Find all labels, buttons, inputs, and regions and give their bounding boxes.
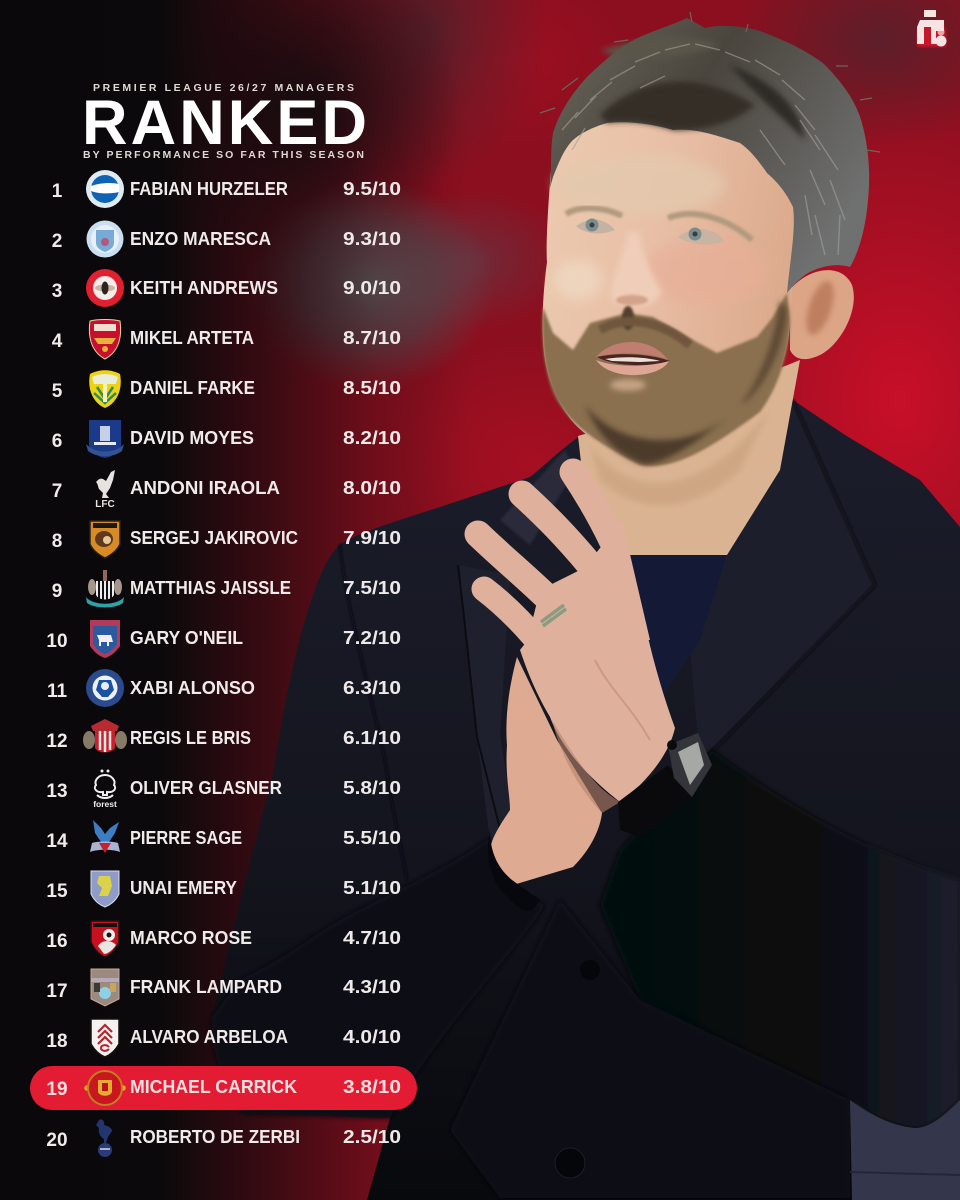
row 17: FRANK LAMPARD xyxy=(130,976,282,997)
row 10: 7.2/10 xyxy=(343,627,401,648)
row 16: 16 xyxy=(46,931,68,952)
hair xyxy=(540,12,880,293)
row 11: 11 xyxy=(47,681,67,702)
row 15: 15 xyxy=(46,881,68,902)
row 4: MIKEL ARTETA xyxy=(130,327,254,348)
crest: Aston Villa xyxy=(91,871,119,907)
crest: Nottingham Forest xyxy=(93,770,117,809)
lining xyxy=(850,1100,960,1200)
row 20: 20 xyxy=(46,1130,68,1151)
row 12: 12 xyxy=(46,731,68,752)
row 9: MATTHIAS JAISSLE xyxy=(130,577,291,598)
row 10: GARY O'NEIL xyxy=(130,627,243,648)
row 7: 8.0/10 xyxy=(343,477,401,498)
row 2: ENZO MARESCA xyxy=(130,228,271,249)
row 16: 4.7/10 xyxy=(343,927,401,948)
row 4: 8.7/10 xyxy=(343,327,401,348)
row 11: XABI ALONSO xyxy=(130,677,255,698)
crest: Brighton xyxy=(86,170,124,208)
watch xyxy=(618,733,712,837)
row 3 xyxy=(52,269,401,307)
row 1 xyxy=(52,170,401,208)
crest: Fulham xyxy=(91,1019,119,1057)
row 17 xyxy=(46,969,401,1006)
face xyxy=(543,100,800,464)
row 13: 5.8/10 xyxy=(343,777,401,798)
row 15: 5.1/10 xyxy=(343,877,401,898)
row 5 xyxy=(52,370,401,408)
row 19 highlighted: MICHAEL CARRICK xyxy=(130,1076,298,1097)
crest: Bournemouth xyxy=(91,921,119,957)
row 14: PIERRE SAGE xyxy=(130,827,242,848)
ear xyxy=(790,270,854,359)
row 3: KEITH ANDREWS xyxy=(130,277,278,298)
row 9: 7.5/10 xyxy=(343,577,401,598)
ring xyxy=(541,605,566,626)
row 7: 7 xyxy=(52,481,62,502)
row 3: 3 xyxy=(52,281,62,302)
row 1: 9.5/10 xyxy=(343,178,401,199)
row 12: 6.1/10 xyxy=(343,727,401,748)
row 9 xyxy=(52,570,401,608)
kicker: PREMIER LEAGUE 26/27 MANAGERS xyxy=(93,82,354,94)
shirt xyxy=(625,553,727,700)
row 18 xyxy=(46,1019,401,1057)
row 1: 1 xyxy=(52,181,63,202)
coat folds xyxy=(212,400,960,1200)
row 6: 8.2/10 xyxy=(343,427,401,448)
row 7: ANDONI IRAOLA xyxy=(130,477,280,498)
row 6: DAVID MOYES xyxy=(130,427,254,448)
row 13: 13 xyxy=(46,781,68,802)
crest: Nottingham Forest: forest xyxy=(93,799,117,809)
crest: Manchester City xyxy=(86,220,124,258)
sleeve: right forearm xyxy=(600,750,960,1128)
row 18: ALVARO ARBELOA xyxy=(130,1026,288,1047)
row 11: 6.3/10 xyxy=(343,677,401,698)
row 19 highlighted xyxy=(30,1066,417,1110)
row 15: UNAI EMERY xyxy=(130,877,238,898)
row 8: 8 xyxy=(52,531,62,552)
row 11 xyxy=(47,669,401,707)
crest: Crystal Palace xyxy=(90,820,120,853)
crest: Ipswich xyxy=(90,620,120,658)
row 12: REGIS LE BRIS xyxy=(130,727,251,748)
row 6 xyxy=(52,420,401,458)
row 2: 9.3/10 xyxy=(343,228,401,249)
row 20 xyxy=(46,1119,401,1157)
row 16: MARCO ROSE xyxy=(130,927,252,948)
row 8: SERGEJ JAKIROVIC xyxy=(130,527,298,548)
eyes and brows xyxy=(566,208,752,244)
row 14: 14 xyxy=(46,831,68,852)
row 20: 2.5/10 xyxy=(343,1126,401,1147)
row 19 highlighted: 19 xyxy=(46,1079,68,1100)
row 7 xyxy=(52,470,401,510)
highlight pill xyxy=(30,1066,417,1110)
crest: Newcastle xyxy=(86,570,124,608)
row 17: 17 xyxy=(46,981,68,1002)
crest: Liverpool xyxy=(95,470,115,510)
row 15 xyxy=(46,871,401,907)
row 9: 9 xyxy=(52,581,62,602)
crest: Sunderland xyxy=(83,719,127,752)
crest: Liverpool: LFC xyxy=(95,499,115,510)
sleeve: left forearm xyxy=(212,838,545,1118)
crest: Chelsea xyxy=(86,669,124,707)
row 14 xyxy=(46,820,401,853)
row 8 xyxy=(52,521,401,558)
crest: Coventry xyxy=(91,969,119,1006)
crest: Brentford xyxy=(86,269,124,307)
coat xyxy=(212,400,960,1200)
row 18: 4.0/10 xyxy=(343,1026,401,1047)
crest: Hull City xyxy=(90,521,120,558)
photo: manager xyxy=(212,12,960,1200)
row 2 xyxy=(52,220,401,258)
row 19 highlighted: 3.8/10 xyxy=(343,1076,401,1097)
crest: Leeds xyxy=(89,370,121,408)
mouth xyxy=(596,342,670,375)
row 20: ROBERTO DE ZERBI xyxy=(130,1126,300,1147)
ranking list xyxy=(30,170,417,1157)
row 13 xyxy=(46,770,401,809)
brand logo xyxy=(917,10,946,47)
row 5: 8.5/10 xyxy=(343,377,401,398)
row 5: DANIEL FARKE xyxy=(130,377,255,398)
beard xyxy=(542,293,790,466)
neck xyxy=(578,360,800,555)
row 2: 2 xyxy=(52,231,62,252)
row 3: 9.0/10 xyxy=(343,277,401,298)
crest: Everton xyxy=(86,420,124,458)
row 14: 5.5/10 xyxy=(343,827,401,848)
row 10 xyxy=(46,620,401,658)
crest: Tottenham xyxy=(96,1119,112,1157)
row 8: 7.9/10 xyxy=(343,527,401,548)
hands xyxy=(478,472,675,888)
row 1: FABIAN HURZELER xyxy=(130,178,288,199)
row 13: OLIVER GLASNER xyxy=(130,777,282,798)
row 10: 10 xyxy=(46,631,68,652)
row 17: 4.3/10 xyxy=(343,976,401,997)
heading: RANKED xyxy=(82,88,367,158)
cuff xyxy=(488,830,540,911)
title block xyxy=(82,82,367,161)
row 6: 6 xyxy=(52,431,62,452)
row 16 xyxy=(46,921,401,957)
row 12 xyxy=(46,719,401,752)
row 5: 5 xyxy=(52,381,63,402)
crest: Arsenal xyxy=(89,320,121,359)
row 18: 18 xyxy=(46,1031,68,1052)
row 4: 4 xyxy=(52,331,63,352)
subtitle: BY PERFORMANCE SO FAR THIS SEASON xyxy=(83,149,364,161)
row 4 xyxy=(52,320,401,359)
coat buttons xyxy=(555,960,600,1178)
crest: Manchester United xyxy=(84,1071,126,1105)
